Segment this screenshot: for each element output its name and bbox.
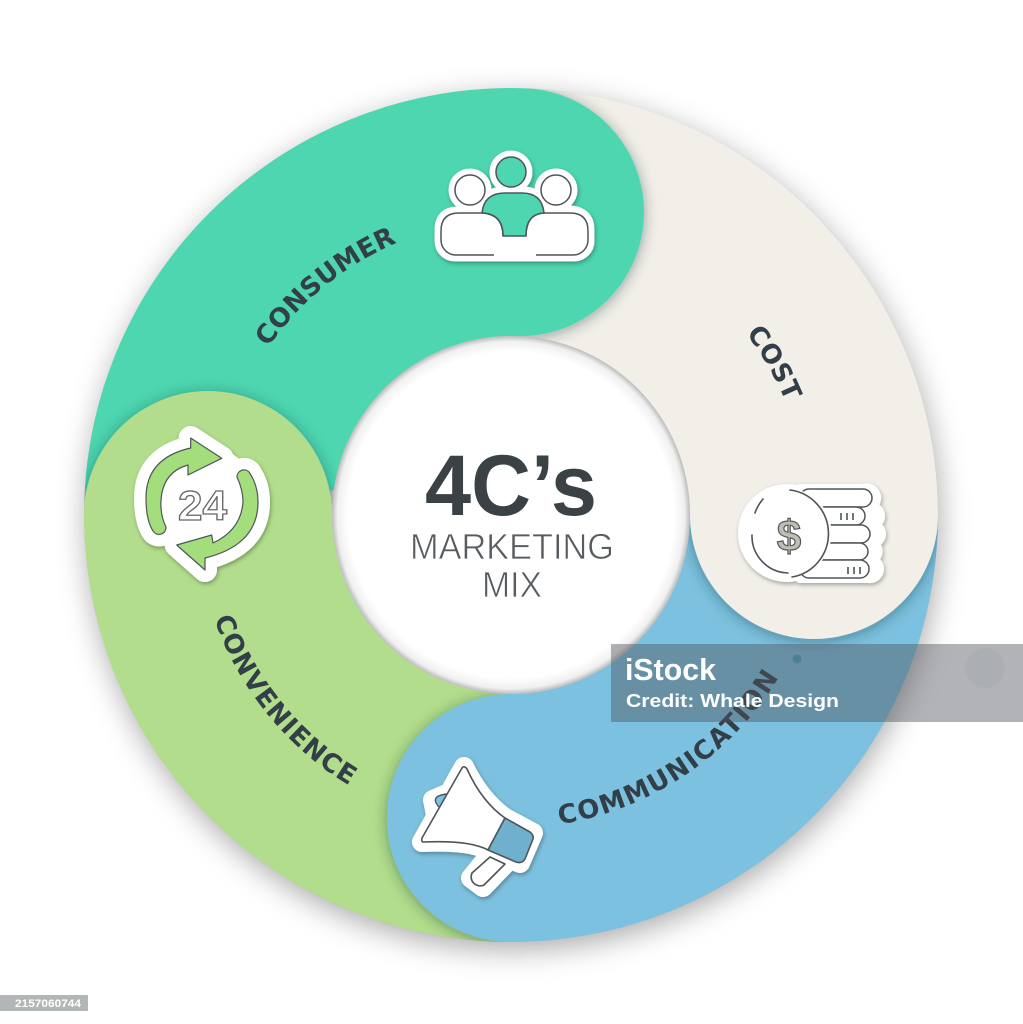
- icon: 24 hour arrows: [146, 438, 258, 570]
- subtitle: mix: MIX: [482, 564, 542, 605]
- watermark logo: iStock: [625, 652, 717, 687]
- panel: consumer segment: [85, 88, 644, 490]
- label: convenience: CONVENIENCE: [216, 616, 358, 784]
- subtitle: marketing: MARKETING: [410, 526, 614, 567]
- icon: 24 hour arrows: 24: [178, 482, 228, 529]
- watermark credit: Credit: Whale Design: [626, 691, 839, 711]
- icon: megaphone: [422, 767, 533, 887]
- image id tag: 2157060744: [15, 998, 82, 1010]
- image id tag: [0, 995, 88, 1011]
- panel: cost segment: [511, 88, 938, 639]
- panel: convenience lobe overlapping consumer: [84, 384, 335, 530]
- watermark banner: [611, 644, 1023, 722]
- label: consumer: CONSUMER: [257, 228, 396, 343]
- icon: coin stack: $: [777, 512, 801, 561]
- label: communication: COMMUNICATION: [558, 669, 778, 823]
- center title block: [410, 438, 614, 605]
- label: cost: COST: [750, 326, 803, 396]
- panel: convenience base segment: [84, 489, 508, 942]
- panel: communication segment: [387, 515, 938, 942]
- center circle: [332, 336, 690, 694]
- ring backdrop shadow: [85, 89, 937, 941]
- icon: coin stack: [742, 488, 881, 578]
- icon: consumer group: [441, 157, 588, 255]
- title: 4C's: 4C’s: [425, 438, 597, 534]
- ring segments: [84, 88, 938, 942]
